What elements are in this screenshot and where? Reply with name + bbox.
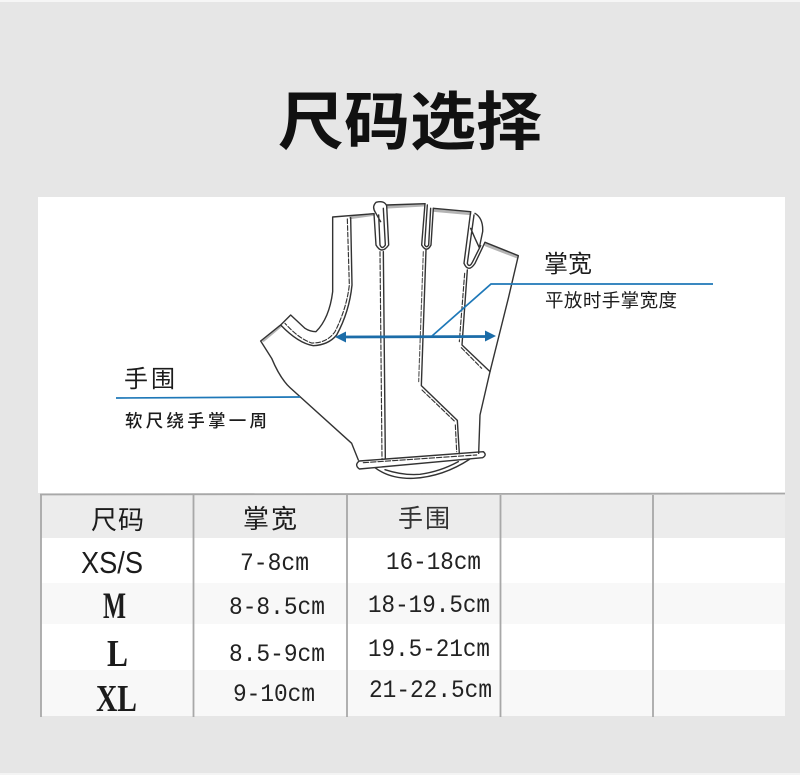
table header [91,504,450,535]
table header: 掌宽 [243,504,297,534]
label: palm width [544,251,677,311]
table grid lines [40,494,785,717]
row: XS/S [81,545,481,580]
size table [40,494,785,720]
label: palm width: 平放时手掌宽度 [545,290,677,311]
label: hand circumference: 软尺绕手掌一周 [125,411,267,431]
row: L: 8.5-9cm [229,640,325,669]
panel: glove diagram [38,197,785,493]
row: XL: XL [96,678,137,720]
row: XL: 9-10cm [233,680,315,709]
row: M: 18-19.5cm [368,591,490,620]
label: hand circumference: 手围 [124,366,175,393]
glove outline [261,204,518,460]
row: XS/S: XS/S [81,545,143,580]
row: XL: 21-22.5cm [369,676,492,705]
seams [383,250,490,458]
row: XS/S: 16-18cm [386,548,481,577]
row: XL [96,676,492,720]
row: XS/S: 7-8cm [240,549,309,578]
row: M: 8-8.5cm [229,593,325,622]
row: L [107,633,490,675]
table header: 手围 [398,505,450,533]
label: palm width: 掌宽 [544,251,592,278]
palm width arrow [335,284,713,342]
thumb inner edge [281,218,352,346]
glove cuff [357,452,485,478]
table row backgrounds [41,495,785,716]
row: M [103,586,490,627]
row: L: 19.5-21cm [368,635,490,664]
label: hand circumference [124,366,267,431]
title: 尺码选择 [278,72,542,163]
fabric hem shading [263,205,517,340]
table header: 尺码 [91,505,144,535]
glove illustration [261,202,518,478]
hand circumference leader line [116,397,300,398]
row: L: L [107,633,128,675]
row: M: M [103,586,126,627]
finger gussets [374,202,485,268]
